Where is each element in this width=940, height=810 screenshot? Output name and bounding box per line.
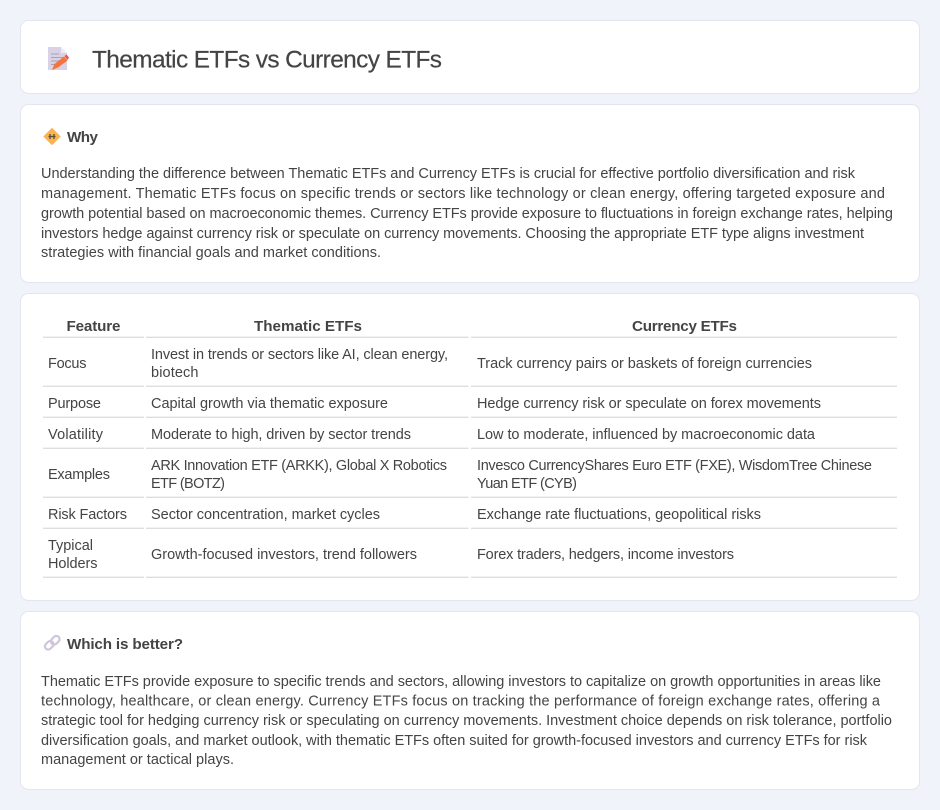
row: typical holders: Holders bbox=[48, 556, 98, 572]
row: focus bbox=[48, 347, 812, 381]
icon: link bbox=[44, 635, 61, 651]
row: typical holders: Growth-focused investors, trend followers bbox=[151, 547, 417, 563]
text block: which is better paragraph: Thematic ETFs provide exposure to specific trends and sectors, allowing investors to capitalize on growth opportunities in areas like bbox=[41, 674, 881, 690]
row: focus: Track currency pairs or baskets of foreign currencies bbox=[477, 356, 812, 372]
row: purpose bbox=[48, 396, 821, 412]
panel: title card bbox=[20, 20, 920, 94]
row: risk factors: Exchange rate fluctuations, geopolitical risks bbox=[477, 507, 761, 523]
panel: comparison table bbox=[20, 294, 920, 600]
row: risk factors: Sector concentration, market cycles bbox=[151, 507, 380, 523]
row: examples: Yuan ETF (CYB) bbox=[477, 476, 577, 492]
heading: why: Why bbox=[67, 129, 99, 146]
text block: why paragraph: strategies with financial goals and market conditions. bbox=[41, 245, 381, 261]
text block: which is better paragraph: strategic tool for hedging currency risk or speculating on currency movements. Investment choice depends on risk tolerance, portfolio bbox=[41, 713, 892, 729]
table header: Feature bbox=[66, 318, 120, 335]
panel: which is better bbox=[20, 612, 920, 790]
row: examples: Examples bbox=[48, 467, 110, 483]
text block: which is better paragraph: management or tactical plays. bbox=[41, 752, 234, 768]
text block: which is better paragraph: technology, healthcare, or clean energy. Currency ETFs focus on tracking the performance of foreign exchange rates, offering a bbox=[41, 694, 881, 710]
row: volatility: Low to moderate, influenced by macroeconomic data bbox=[477, 427, 816, 443]
row: typical holders: Typical bbox=[48, 538, 93, 554]
row: typical holders bbox=[48, 538, 734, 572]
table header: Currency ETFs bbox=[632, 318, 737, 335]
row: purpose: Purpose bbox=[48, 396, 101, 412]
icon: diamond sign bbox=[44, 128, 60, 144]
table header bbox=[66, 318, 737, 335]
row: risk factors bbox=[48, 507, 761, 523]
row: examples: ETF (BOTZ) bbox=[151, 476, 225, 492]
text block: why paragraph: management. Thematic ETFs focus on specific trends or sectors like technology or clean energy, offering targeted exposure and bbox=[41, 186, 885, 202]
text block: why paragraph bbox=[41, 166, 893, 261]
table header: Thematic ETFs bbox=[254, 318, 362, 335]
row: volatility: Volatility bbox=[48, 427, 104, 443]
text block: which is better paragraph: diversification goals, and market outlook, with thematic ETFs often suited for growth-focused investors and currency ETFs for risk bbox=[41, 733, 868, 749]
row: purpose: Capital growth via thematic exposure bbox=[151, 396, 388, 412]
icon: document with pencil bbox=[48, 47, 69, 70]
row: volatility bbox=[48, 427, 816, 443]
text block: which is better paragraph bbox=[41, 674, 892, 768]
panel: why bbox=[20, 104, 920, 282]
row: focus: Invest in trends or sectors like AI, clean energy, bbox=[151, 347, 448, 363]
row: typical holders: Forex traders, hedgers, income investors bbox=[477, 547, 734, 563]
text block: why paragraph: investors hedge against currency risk or speculate on currency movements. Choosing the appropriate ETF type aligns investment bbox=[41, 226, 864, 242]
text block: why paragraph: growth potential based on macroeconomic themes. Currency ETFs provide exposure to fluctuations in foreign exchange rates, helping bbox=[41, 206, 893, 222]
row: volatility: Moderate to high, driven by sector trends bbox=[151, 427, 411, 443]
row: purpose: Hedge currency risk or speculate on forex movements bbox=[477, 396, 821, 412]
row: examples bbox=[48, 458, 872, 492]
text block: why paragraph: Understanding the difference between Thematic ETFs and Currency ETFs is crucial for effective portfolio diversification and risk bbox=[41, 166, 856, 182]
row: focus: biotech bbox=[151, 365, 198, 381]
table grid lines bbox=[43, 337, 897, 577]
row: risk factors: Risk Factors bbox=[48, 507, 127, 523]
heading: which is better: Which is better? bbox=[67, 636, 183, 653]
title: Thematic ETFs vs Currency ETFs bbox=[92, 46, 442, 74]
row: focus: Focus bbox=[48, 356, 86, 372]
row: examples: ARK Innovation ETF (ARKK), Global X Robotics bbox=[151, 458, 447, 474]
row: examples: Invesco CurrencyShares Euro ETF (FXE), WisdomTree Chinese bbox=[477, 458, 872, 474]
